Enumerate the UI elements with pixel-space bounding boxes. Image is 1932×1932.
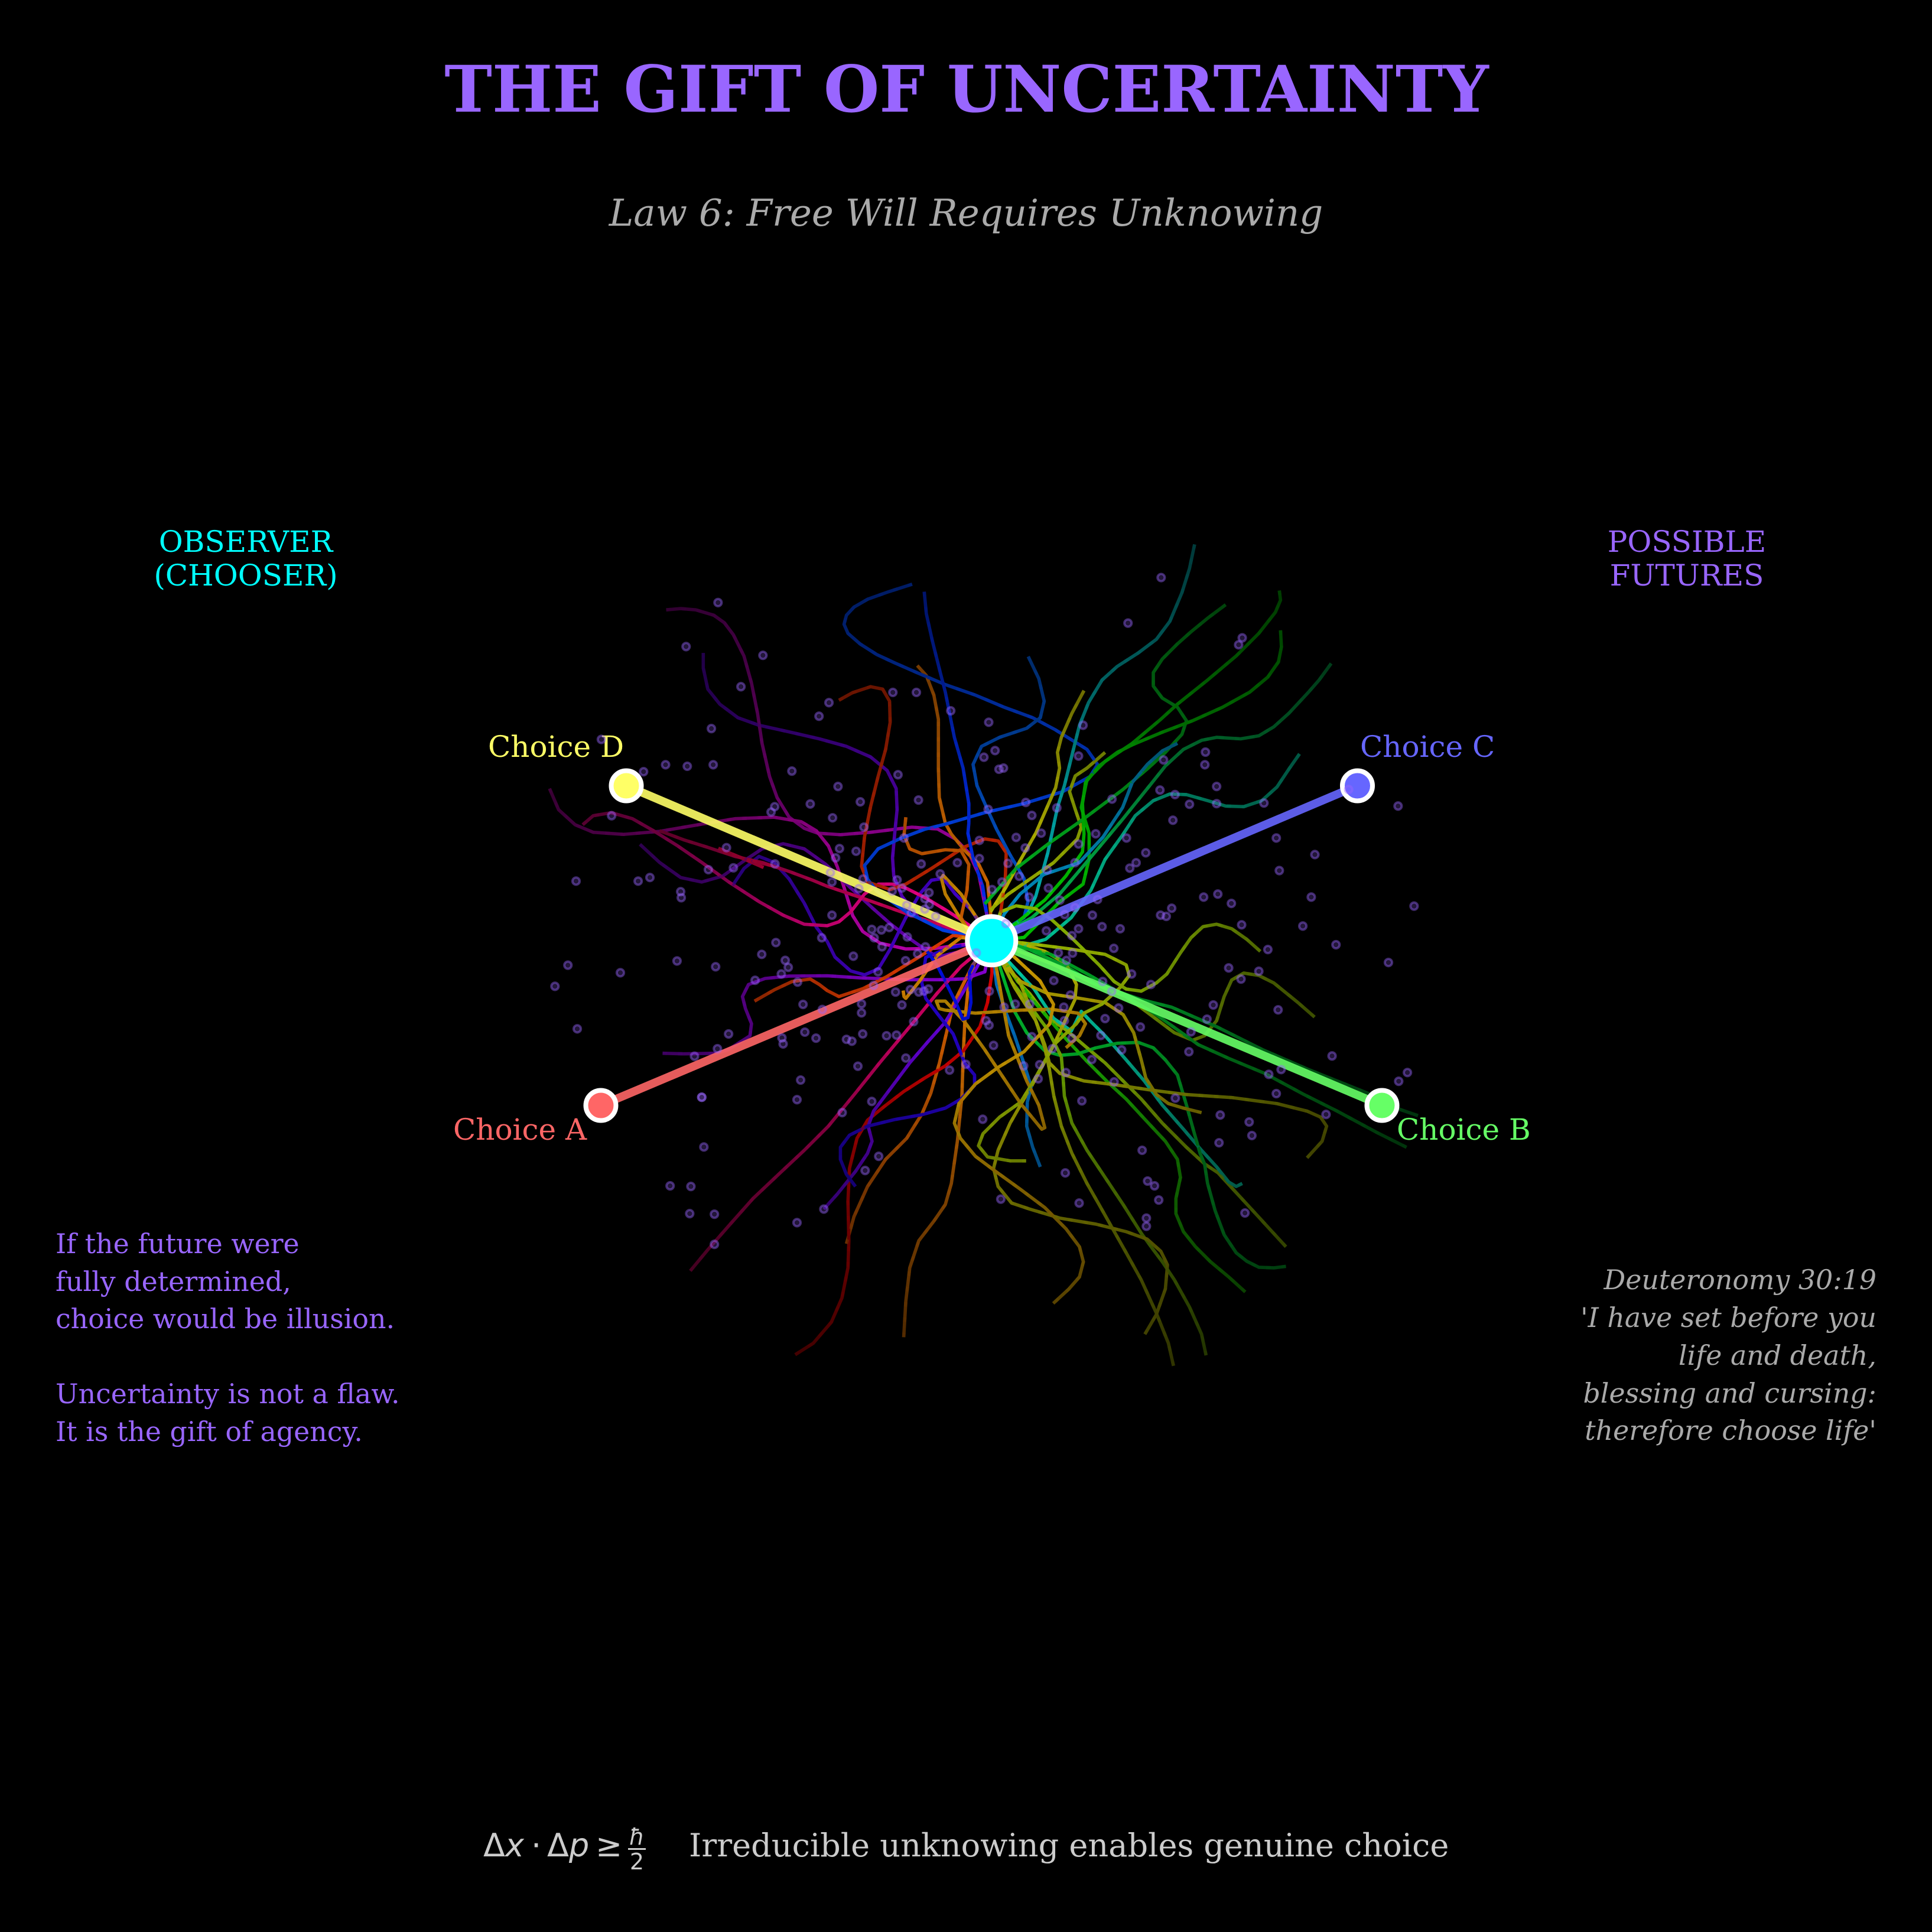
node: Choice C [1342,770,1372,801]
text block: philosophy note: If the future were [56,1228,300,1260]
node: Choice B [1367,1091,1397,1120]
label: observer: (CHOOSER) [154,558,338,593]
title: THE GIFT OF UNCERTAINTY [444,51,1489,127]
text block: scripture quote: therefore choose life' [1585,1414,1876,1446]
equation: uncertainty principle: Δp [547,1827,589,1864]
equation: uncertainty principle: ≥ [596,1827,622,1864]
label: possible futures: FUTURES [1610,558,1764,593]
equation: uncertainty principle: ħ [629,1824,645,1850]
dots upper-right [947,574,1417,978]
text block: scripture quote: 'I have set before you [1580,1302,1876,1333]
label: observer: OBSERVER [159,525,334,559]
node: Choice A [586,1091,616,1120]
dots upper-left [564,599,944,978]
label: Choice D: Choice D [488,730,624,764]
trajectories heading lower-left [662,935,992,1355]
scattered possibility dots [551,574,1417,1248]
trajectories heading upper-left [549,584,1098,975]
quantum trajectories fan [549,544,1418,1366]
equation: uncertainty principle: · [531,1827,541,1864]
equation: uncertainty principle: Δx [483,1827,525,1864]
caption: irreducible unknowing: Irreducible unknowing enables genuine choice [689,1827,1449,1864]
text block: philosophy note: fully determined, [56,1266,291,1297]
text block: philosophy note: Uncertainty is not a flaw. [56,1378,400,1410]
label: Choice C: Choice C [1360,730,1495,764]
line: observer to Choice B [991,941,1382,1105]
label: Choice B: Choice B [1397,1113,1531,1147]
equation: uncertainty principle [483,1824,646,1875]
line: observer to Choice D [626,786,991,941]
dots lower-right [946,975,1411,1230]
trajectories heading upper-right [973,544,1331,991]
node: Choice D [611,770,642,801]
trajectory segment overlap highlights [549,544,1418,1366]
trajectories heading lower-right [927,941,1418,1366]
text block: scripture quote: Deuteronomy 30:19 [1603,1264,1876,1296]
text block: philosophy note: choice would be illusion. [56,1303,395,1335]
equation: uncertainty principle: 2 [630,1849,644,1875]
line: observer to Choice C [991,786,1357,941]
dots lower-left [551,977,932,1248]
text block: scripture quote: life and death, [1679,1339,1876,1371]
text block: philosophy note: It is the gift of agency. [56,1416,363,1448]
label: possible futures: POSSIBLE [1608,525,1766,559]
text block: scripture quote: blessing and cursing: [1583,1377,1876,1409]
subtitle: Law 6: Free Will Requires Unknowing [609,191,1323,235]
node: observer [967,916,1016,965]
label: Choice A: Choice A [453,1113,587,1147]
line: observer to Choice A [601,941,991,1105]
